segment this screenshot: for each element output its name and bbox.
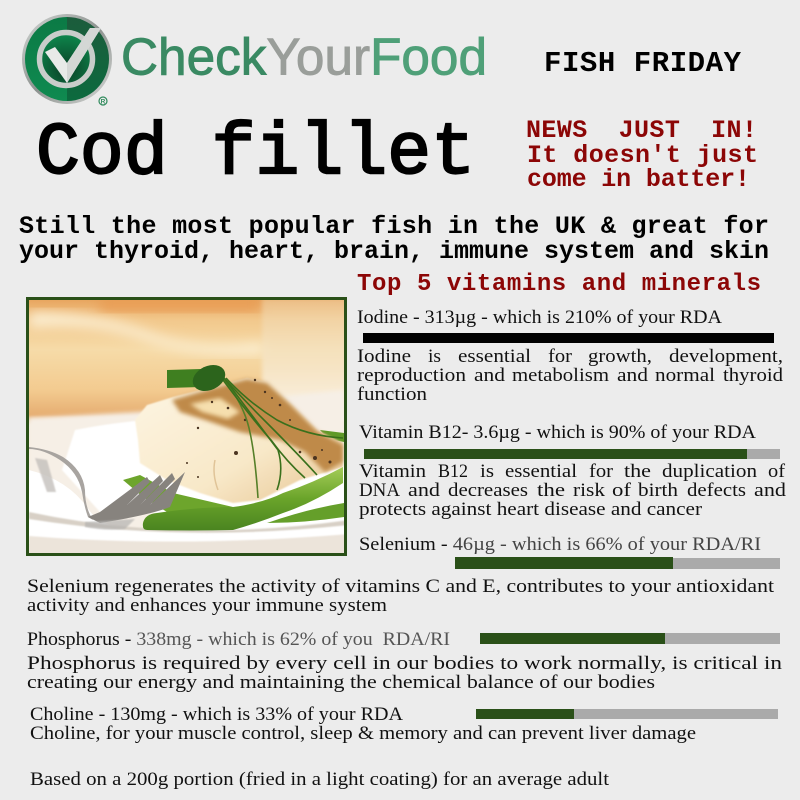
text: vitamin B12 description: and	[754, 481, 787, 501]
text: vitamin B12 description: the	[624, 462, 651, 482]
label: iodine: Iodine - 313µg - which is 210% of your RDA	[357, 308, 723, 328]
text: iodine description	[357, 347, 784, 405]
callout: news just in	[526, 116, 758, 194]
text: vitamin B12 description	[359, 462, 787, 520]
text: vitamin B12 description: defects	[687, 481, 746, 501]
text: vitamin B12 description: essential	[505, 462, 577, 482]
logo: CheckYourFood	[22, 14, 487, 106]
bar: choline 33%	[476, 709, 778, 719]
text: selenium description: Selenium regenerates the activity of vitamins C and E, contributes to your antioxidant	[27, 577, 775, 597]
text: iodine description: function	[357, 385, 427, 405]
text: selenium description	[27, 577, 775, 616]
text: vitamin B12 description: protects against heart disease and cancer	[359, 500, 702, 520]
text: iodine description: is	[428, 347, 441, 367]
text: vitamin B12 description: B12	[438, 462, 468, 482]
text: iodine description: reproduction	[357, 366, 466, 386]
text: vitamin B12 description: for	[589, 462, 613, 482]
text: vitamin B12 description: of	[612, 481, 632, 501]
text: iodine description: essential	[458, 347, 531, 367]
heading: Fish Friday: FISH FRIDAY	[544, 47, 742, 80]
subtitle: Still the most popular fish in the UK & great for	[19, 212, 769, 241]
text: selenium description: activity and enhances your immune system	[27, 596, 388, 616]
section: vitamin B12	[359, 423, 787, 520]
heading: top 5 vitamins and minerals: Top 5 vitamins and minerals	[357, 271, 761, 298]
bar: iodine 210%	[363, 333, 774, 343]
text: iodine description: normal	[655, 366, 715, 386]
chives	[223, 378, 343, 498]
text: vitamin B12 description: DNA	[359, 481, 401, 501]
bean front	[143, 467, 343, 530]
label: selenium: Selenium - 46µg - which is 66% of your RDA/RI	[359, 535, 761, 555]
text: iodine description: and	[474, 366, 506, 386]
callout: news just in: NEWS JUST IN!	[526, 116, 757, 145]
text: iodine description: metabolism	[512, 366, 610, 386]
section: choline	[30, 705, 778, 744]
label: phosphorus: Phosphorus - 338mg - which is 62% of you RDA/RI	[27, 630, 450, 650]
bar: vitamin B12 90%	[364, 449, 780, 459]
callout: news just in: come in batter!	[527, 165, 750, 194]
text: vitamin B12 description: Vitamin	[359, 462, 426, 482]
callout: news just in: It doesn't just	[527, 141, 758, 170]
text: iodine description: for	[548, 347, 572, 367]
icon: registered mark	[99, 97, 107, 106]
footnote: Based on a 200g portion (fried in a light coating) for an average adult	[30, 770, 610, 790]
subtitle	[19, 212, 769, 266]
text: iodine description: and	[617, 366, 649, 386]
text: vitamin B12 description: of	[768, 462, 786, 482]
bean lower	[267, 503, 344, 523]
subtitle: your thyroid, heart, brain, immune system and skin	[19, 237, 769, 266]
text: vitamin B12 description: and	[408, 481, 441, 501]
text: phosphorus description	[27, 654, 782, 693]
text: phosphorus description: creating our energy and maintaining the chemical balance of our bodies	[27, 673, 655, 693]
text: vitamin B12 description: duplication	[662, 462, 757, 482]
bean back	[123, 475, 233, 512]
section: iodine	[357, 308, 784, 405]
text: iodine description: Iodine	[357, 347, 411, 367]
section: phosphorus	[27, 630, 782, 693]
icon: registered mark: R	[101, 98, 106, 106]
label: choline: Choline - 130mg - which is 33% of your RDA	[30, 705, 404, 725]
fish	[135, 378, 343, 503]
fork	[29, 447, 93, 520]
icon: green check badge	[22, 14, 112, 104]
text: vitamin B12 description: birth	[638, 481, 678, 501]
bar: selenium 66%	[455, 557, 780, 569]
text: iodine description: development,	[669, 347, 783, 367]
logo wordmark: CheckYourFood	[121, 28, 487, 86]
label: vitamin B12: Vitamin B12- 3.6µg - which is 90% of your RDA	[359, 423, 757, 443]
bar: phosphorus 62%	[480, 633, 780, 644]
section: selenium	[27, 535, 780, 616]
text: vitamin B12 description: the	[537, 481, 565, 501]
text: vitamin B12 description: risk	[573, 481, 606, 501]
text: vitamin B12 description: is	[480, 462, 494, 482]
photo: cod fillet on a plate	[28, 298, 355, 555]
title: Cod fillet: Cod fillet	[36, 112, 475, 195]
text: phosphorus description: Phosphorus is required by every cell in our bodies to work normally, is critical in	[27, 654, 782, 674]
text: iodine description: growth,	[588, 347, 652, 367]
text: iodine description: thyroid	[723, 366, 784, 386]
text: vitamin B12 description: decreases	[448, 481, 528, 501]
text: choline description: Choline, for your muscle control, sleep & memory and can prevent liver damage	[30, 724, 696, 744]
